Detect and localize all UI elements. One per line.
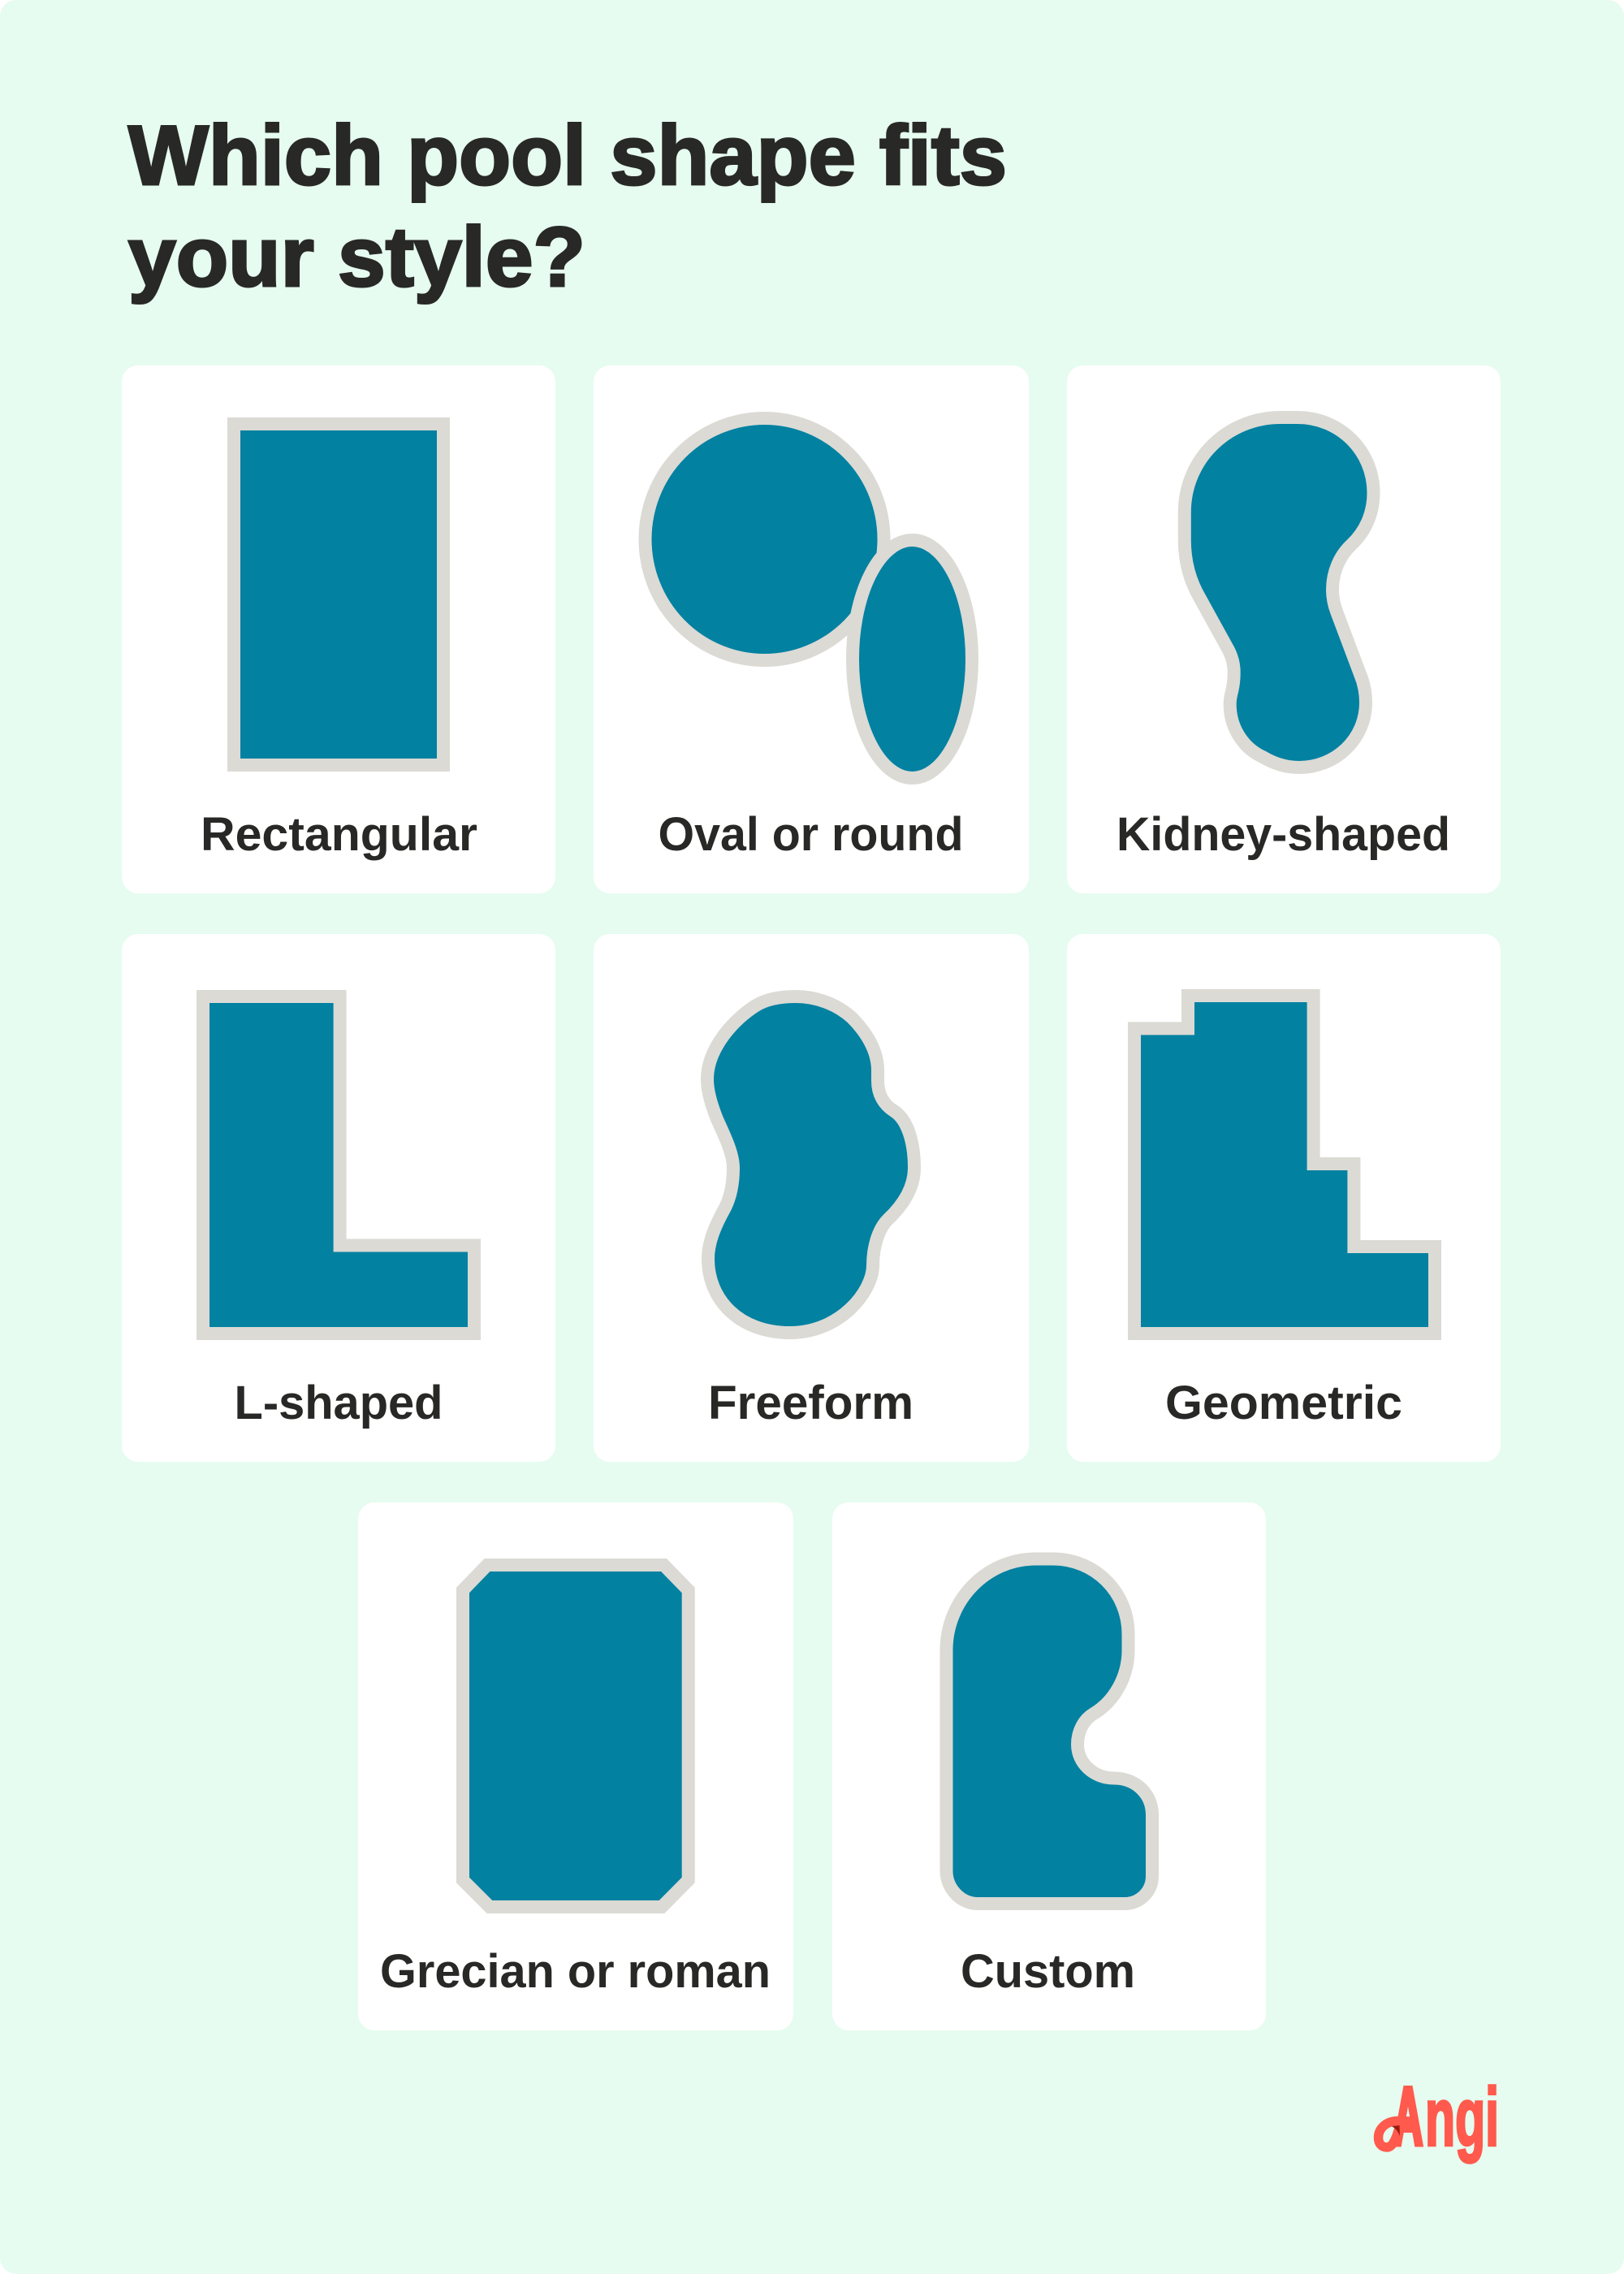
label: rectangular: Rectangular [201,808,477,861]
icon: oval and round pools [645,418,972,778]
logo: Angi: A [1393,2071,1423,2161]
label: L-shaped: L-shaped [234,1377,443,1429]
title: Which pool shape fits [128,109,1007,203]
panel: geometric [1067,934,1501,1462]
icon: rectangular pool [234,424,443,765]
icon: L-shaped pool [203,996,474,1334]
label: geometric: Geometric [1165,1377,1402,1429]
icon: geometric pool [1134,996,1435,1334]
icon: custom pool [947,1559,1152,1904]
panel: kidney-shaped [1067,365,1501,893]
label: freeform: Freeform [708,1377,914,1429]
icon: freeform pool [707,996,914,1333]
logo: Angi [1379,2071,1499,2164]
label: kidney-shaped: Kidney-shaped [1116,808,1450,861]
logo: Angi: ngi [1425,2073,1499,2164]
panel: grecian or roman [358,1502,793,2030]
icon: grecian pool [463,1565,689,1907]
panel: freeform [594,934,1029,1462]
panel: custom [832,1502,1266,2030]
panel: oval or round [594,365,1029,893]
title [128,109,1007,305]
label: oval or round: Oval or round [658,808,963,861]
label: custom: Custom [961,1945,1135,1998]
icon: kidney pool [1185,417,1374,767]
label: grecian or roman: Grecian or roman [380,1945,771,1998]
title: your style? [128,210,585,305]
panel: rectangular [122,365,555,893]
panel: L-shaped [122,934,555,1462]
